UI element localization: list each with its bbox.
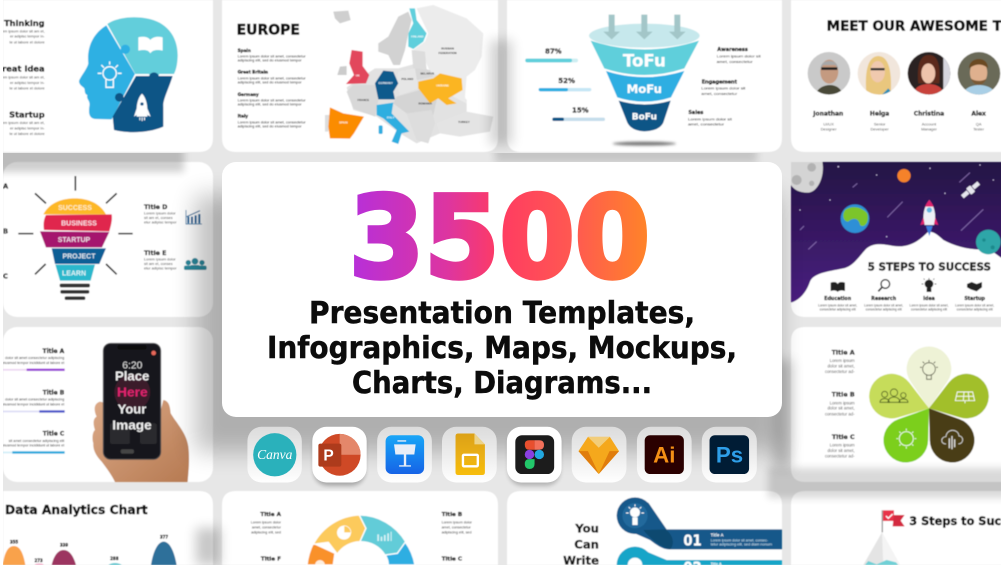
text: Title C <box>0 431 65 454</box>
funnel shadow <box>613 142 676 146</box>
text: Title A: consectetur ad- <box>825 369 855 374</box>
text: Thinking: Thinking <box>4 18 45 28</box>
label: Engagement: Engagement <box>702 79 738 85</box>
icon: bulb <box>920 360 938 379</box>
headline: Infographics, Maps, Mockups, <box>267 331 737 366</box>
panel: 3 Steps to Success <box>791 491 1005 565</box>
segment: SUCCESS <box>43 198 106 214</box>
list: countries: Great Britain <box>238 70 268 75</box>
earth <box>841 204 869 233</box>
step 01: Title A <box>711 532 725 537</box>
moon <box>791 162 823 193</box>
team names: UI/UX <box>823 121 834 126</box>
icon: rocket <box>134 94 151 121</box>
step 02 <box>617 547 782 565</box>
step: Research <box>864 280 903 312</box>
head illustration <box>79 17 178 132</box>
text: Title B: Lorem ipsum dolor <box>442 521 473 525</box>
label: Sales <box>688 110 733 127</box>
phone: Place <box>115 368 149 383</box>
text: Startup <box>3 110 46 136</box>
text: Title D: Title D <box>144 204 167 211</box>
text: Title C: dolor sit amet, <box>827 448 855 453</box>
team names: Helga <box>870 111 889 118</box>
text: Title C <box>825 434 855 459</box>
photo: Christina <box>907 50 952 97</box>
left letters <box>3 183 9 280</box>
text: Title C: Title C <box>832 434 855 441</box>
step 01: 01 <box>683 531 702 549</box>
text: Title E: sit am et, conses <box>144 262 173 266</box>
funnel: ToFu <box>591 41 699 75</box>
text: Startup: te ut labore et dolore <box>10 132 45 136</box>
text: Title B: Lorem ipsum <box>830 400 855 405</box>
step 01: tetur adipiscing elit, sed diam nonum <box>711 542 772 546</box>
text: Great Idea: te ut labore et dolore <box>10 86 45 90</box>
list: countries: Lorem ipsum dolor sit amet, consectetur <box>238 120 306 124</box>
text: Title A: Title A <box>42 348 65 355</box>
text: Title A: eiusmod tempor incididunt ut labore et <box>2 361 64 365</box>
text: Title B <box>442 512 473 535</box>
team names <box>812 111 986 131</box>
text: Great Idea <box>3 64 45 90</box>
text: Title B <box>825 392 855 416</box>
funnel: BoFu <box>619 101 671 131</box>
text: Thinking: te ut labore et dolore <box>10 40 45 44</box>
streaks <box>800 173 983 249</box>
label: Sales: Sales <box>688 110 703 116</box>
text: Title A: Lorem ipsum dolor <box>251 521 282 525</box>
petal: left <box>863 368 936 430</box>
main panel <box>222 162 782 417</box>
photo: Helga <box>857 50 902 97</box>
text: Title B: eiusmod tempor incididunt ut labore et <box>2 403 64 407</box>
petal: lower right <box>911 395 983 471</box>
heading: Data Analytics Chart: Data Analytics Chart <box>5 503 148 517</box>
label: Awareness: Lorem ipsum dolor sit <box>717 54 762 59</box>
step: Idea: consectetur adipiscing elit <box>911 308 947 312</box>
text: You Can Write <box>563 521 599 565</box>
petal: top <box>907 347 951 408</box>
text: Title C: Title C <box>43 431 65 438</box>
text: You Can Write: You <box>574 521 599 535</box>
funnel: BoFu: BoFu <box>632 113 657 123</box>
text: Title E <box>144 250 177 270</box>
text: Title A: Title A <box>832 349 855 356</box>
icon: bars <box>377 532 392 541</box>
list: countries: Lorem ipsum dolor sit amet, consectetur <box>238 98 306 102</box>
icon: PowerPoint <box>312 427 367 486</box>
list: countries <box>238 48 306 128</box>
icon: cloud <box>942 430 963 449</box>
satellite <box>960 180 981 200</box>
panel: Data Analytics Chart <box>3 491 213 565</box>
map of Europe: FRANCE <box>357 98 369 102</box>
step: Idea: Idea <box>923 296 935 302</box>
text: Title A: adipiscing elit, sed <box>251 531 281 535</box>
stars <box>799 164 994 237</box>
segment: PROJECT <box>52 248 106 264</box>
text: Title B: dolor sit amet, <box>827 406 855 411</box>
team names: QA <box>976 121 982 126</box>
space background <box>791 162 1005 303</box>
funnel: ToFu: ToFu <box>623 51 666 70</box>
text: Great Idea: er adipisc tempor in- <box>10 81 45 85</box>
left letters: A <box>3 183 9 191</box>
icon: bar chart <box>186 210 202 224</box>
team names: Developer <box>871 126 889 131</box>
icon: Photoshop: Ps <box>716 443 743 468</box>
panel: funnel <box>507 0 782 152</box>
icon: Figma <box>507 427 562 486</box>
text: Startup: er adipisc tempor in- <box>10 126 45 130</box>
step: Education: Education <box>824 296 852 302</box>
panel: lightbulb <box>3 162 213 317</box>
list: countries: adipiscing elit, sed do eiusmod tempor <box>238 102 302 106</box>
panel: petals <box>791 327 1005 482</box>
chart: hills <box>3 534 177 565</box>
map of Europe: RUSSIAN <box>441 47 454 51</box>
segment: STARTUP: STARTUP <box>58 237 91 244</box>
text: Title A: Title A <box>260 512 282 518</box>
panel: 5 steps to success <box>791 162 1005 317</box>
text: Startup: Startup <box>9 109 45 119</box>
chart: hills: 273 <box>34 558 43 563</box>
text: Title A: Lorem ipsum <box>830 358 855 363</box>
text: Title F: Title F <box>261 557 281 563</box>
petal: lower left <box>875 395 947 471</box>
arrows <box>603 15 686 39</box>
headline: Charts, Diagrams... <box>352 366 652 401</box>
list: countries: adipiscing elit, sed do eiusmod tempor <box>238 59 302 63</box>
label: Awareness <box>717 47 762 64</box>
heading: EUROPE: EUROPE <box>237 22 300 38</box>
label: Awareness: Awareness <box>717 47 748 53</box>
map of Europe: ITALY <box>387 116 395 120</box>
panel: You Can Write <box>507 491 782 565</box>
team names: Alex <box>971 111 986 118</box>
icon: Photoshop <box>702 427 757 482</box>
text: Title B: Title B <box>442 512 462 518</box>
text: Title A <box>825 349 855 374</box>
step 01 <box>617 497 782 549</box>
text: Title A: dolor sit amet consectetur adipiscing <box>5 356 64 360</box>
map of Europe <box>325 5 493 144</box>
headline: Presentation Templates, <box>309 296 695 331</box>
mountain <box>863 532 900 565</box>
icon: Google Slides <box>442 427 497 482</box>
step: Research: consectetur adipiscing elit <box>866 308 902 312</box>
text: Title E: Lorem ipsum dolor <box>144 258 176 262</box>
step: Education: Lorem ipsum dolor sit amet, <box>818 304 857 308</box>
label: Awareness: amet, consectetur <box>717 59 753 64</box>
segment: BUSINESS: BUSINESS <box>61 221 97 228</box>
phone: Image <box>112 417 152 432</box>
photo: Alex <box>957 50 1002 97</box>
segment: LEARN <box>55 265 95 281</box>
text: Thinking <box>3 19 45 44</box>
progress: 15%: 15% <box>572 107 589 115</box>
icon: Canva: Canva <box>257 447 293 462</box>
hand behind phone <box>92 400 189 482</box>
icon: Illustrator <box>637 427 692 482</box>
list: countries: adipiscing elit, sed do eiusmod tempor <box>238 124 302 128</box>
icon: lightbulb <box>98 61 122 87</box>
map of Europe: UKRAINE <box>436 84 449 88</box>
phone <box>103 343 161 459</box>
list: countries: adipiscing elit, sed do eiusmod tempor <box>238 80 302 84</box>
text: Title C: Lorem ipsum <box>830 443 855 448</box>
panel: team <box>791 0 1005 152</box>
list: countries: Spain <box>238 48 251 53</box>
chart: hills: 288 <box>110 556 119 561</box>
text: Title A <box>0 348 65 371</box>
text: Title C: sit amet consectetur adipiscing elit <box>9 439 64 443</box>
step: Startup: consectetur adipiscing elit <box>957 308 993 312</box>
icon: Sketch <box>572 427 626 482</box>
segment: STARTUP <box>40 231 109 247</box>
team names: Senior <box>874 121 886 126</box>
step: Idea: Lorem ipsum dolor sit amet, <box>910 304 949 308</box>
orange planet <box>897 169 911 182</box>
text: Title D <box>144 204 177 224</box>
progress: 52% <box>539 77 591 91</box>
step: Idea <box>910 278 949 312</box>
map of Europe: TURKEY <box>458 120 470 124</box>
text: Title C: consectetur ad- <box>825 454 855 459</box>
team names: Jonathan <box>812 111 843 118</box>
map of Europe: FINLAND <box>411 34 424 38</box>
left letters: C <box>3 272 8 280</box>
text: Title A <box>251 512 282 535</box>
segment: BUSINESS <box>44 214 112 231</box>
text: Title B: consectetur ad- <box>825 411 855 416</box>
text: Title B: Title B <box>832 392 855 399</box>
icon: Illustrator: Ai <box>653 443 675 468</box>
step: Startup: Lorem ipsum dolor sit amet, <box>955 304 994 308</box>
rocket <box>920 200 938 236</box>
label: Sales: Lorem ipsum dolor sit <box>688 116 733 121</box>
icon: PowerPoint: P <box>323 448 334 465</box>
donut <box>307 515 415 565</box>
label: Engagement <box>701 79 746 96</box>
text: Title B: adipiscing elit, sed <box>442 531 472 535</box>
list: countries: Lorem ipsum dolor sit amet, consectetur <box>238 76 306 80</box>
step 01: Lorem ipsum dolor sit amet, consec- <box>711 538 768 542</box>
headline <box>267 296 737 401</box>
icon: sun <box>896 429 916 449</box>
text: Title A: dolor sit amet, <box>827 363 855 368</box>
map of Europe: SPAIN <box>339 121 348 125</box>
label: Engagement: amet, consectetur <box>701 91 738 96</box>
text: Title D: etur adipisc tempor <box>144 220 177 224</box>
text: Title C: eiusmod tempor incididunt ut labore et <box>2 444 64 448</box>
photo: Jonathan <box>807 50 852 97</box>
icon: gear <box>315 560 325 565</box>
bulb rays <box>18 176 133 274</box>
icon: Canva <box>247 427 302 482</box>
phone: Here <box>117 385 148 400</box>
map of Europe: FEDERATION <box>439 51 457 55</box>
flag <box>882 510 905 532</box>
segment: LEARN: LEARN <box>62 270 86 277</box>
team names: Designer <box>821 126 837 131</box>
phone: 6:20 <box>122 361 143 372</box>
progress: 87% <box>525 48 578 62</box>
map of Europe: GERMANY <box>378 81 393 85</box>
progress: 15% <box>552 107 605 121</box>
petal: right <box>922 368 995 430</box>
chart: hills: 355 <box>10 539 18 544</box>
segment: PROJECT: PROJECT <box>62 254 96 261</box>
text: Title E: Title E <box>144 250 166 257</box>
heading: 5 steps: 5 STEPS TO SUCCESS <box>868 260 991 273</box>
list: countries: Lorem ipsum dolor sit amet, consectetur <box>238 55 306 59</box>
big number 3500: 3500 <box>349 172 650 304</box>
left letters: B <box>3 228 8 236</box>
text: Title A: amet, consectetur <box>252 526 282 530</box>
team names: Manager <box>921 126 937 131</box>
bulb base <box>60 284 90 300</box>
app icon row <box>247 427 757 486</box>
panel: phone mockup <box>0 327 213 482</box>
text: Title D: sit am et, conses <box>144 216 173 220</box>
map of Europe: ROMANIA <box>419 102 432 106</box>
step: Startup: Startup <box>964 296 985 302</box>
icon: pie <box>337 526 351 540</box>
text: You Can Write: Can <box>574 537 599 551</box>
text: Title E: etur adipisc tempor <box>144 266 177 270</box>
funnel top ellipse <box>589 24 700 48</box>
funnel: MoFu: MoFu <box>627 82 662 96</box>
phone: Your <box>118 401 146 416</box>
panel: head puzzle <box>0 0 213 152</box>
step: Research: Lorem ipsum dolor sit amet, <box>864 304 903 308</box>
panel: cycle diagram <box>222 491 498 565</box>
panel: Europe map <box>222 0 498 152</box>
team names: Account <box>922 121 937 126</box>
icon: Keynote <box>377 427 432 482</box>
icon: people <box>184 258 207 270</box>
map of Europe: BELARUS <box>420 71 434 75</box>
step: Startup <box>955 282 994 312</box>
teal planet <box>976 230 1001 254</box>
text: Title B: amet, consectetur <box>442 526 471 530</box>
step: Education: consectetur adipiscing elit <box>820 308 856 312</box>
text: Title B: Title B <box>43 389 65 396</box>
icon: solar panel <box>955 392 975 403</box>
map of Europe: UK <box>356 73 361 77</box>
text: Thinking: er adipisc tempor in- <box>10 35 45 39</box>
list: countries: Italy <box>238 114 248 119</box>
text: Title B <box>0 389 65 413</box>
progress: 52%: 52% <box>558 77 575 85</box>
chart: hills: 339 <box>60 542 68 547</box>
funnel: MoFu <box>606 71 684 102</box>
text: Title B: dolor sit amet consectetur adipiscing <box>5 398 64 402</box>
progress: 87%: 87% <box>545 48 562 56</box>
chart: hills: 377 <box>160 534 168 539</box>
text: Title C: Title C <box>442 557 462 563</box>
map of Europe: POLAND <box>401 77 413 81</box>
list: countries: Germany <box>238 92 259 97</box>
label: Engagement: Lorem ipsum dolor sit <box>701 86 746 91</box>
team names: Christina <box>914 111 944 118</box>
label: Sales: amet, consectetur <box>688 122 725 127</box>
icon: people <box>880 389 908 402</box>
icon: book <box>138 37 163 53</box>
step: Education <box>818 282 857 312</box>
segment: SUCCESS: SUCCESS <box>58 205 92 212</box>
team names: Tester <box>973 126 985 131</box>
step: Research: Research <box>871 296 897 302</box>
text: Title D: Lorem ipsum dolor <box>144 212 176 216</box>
